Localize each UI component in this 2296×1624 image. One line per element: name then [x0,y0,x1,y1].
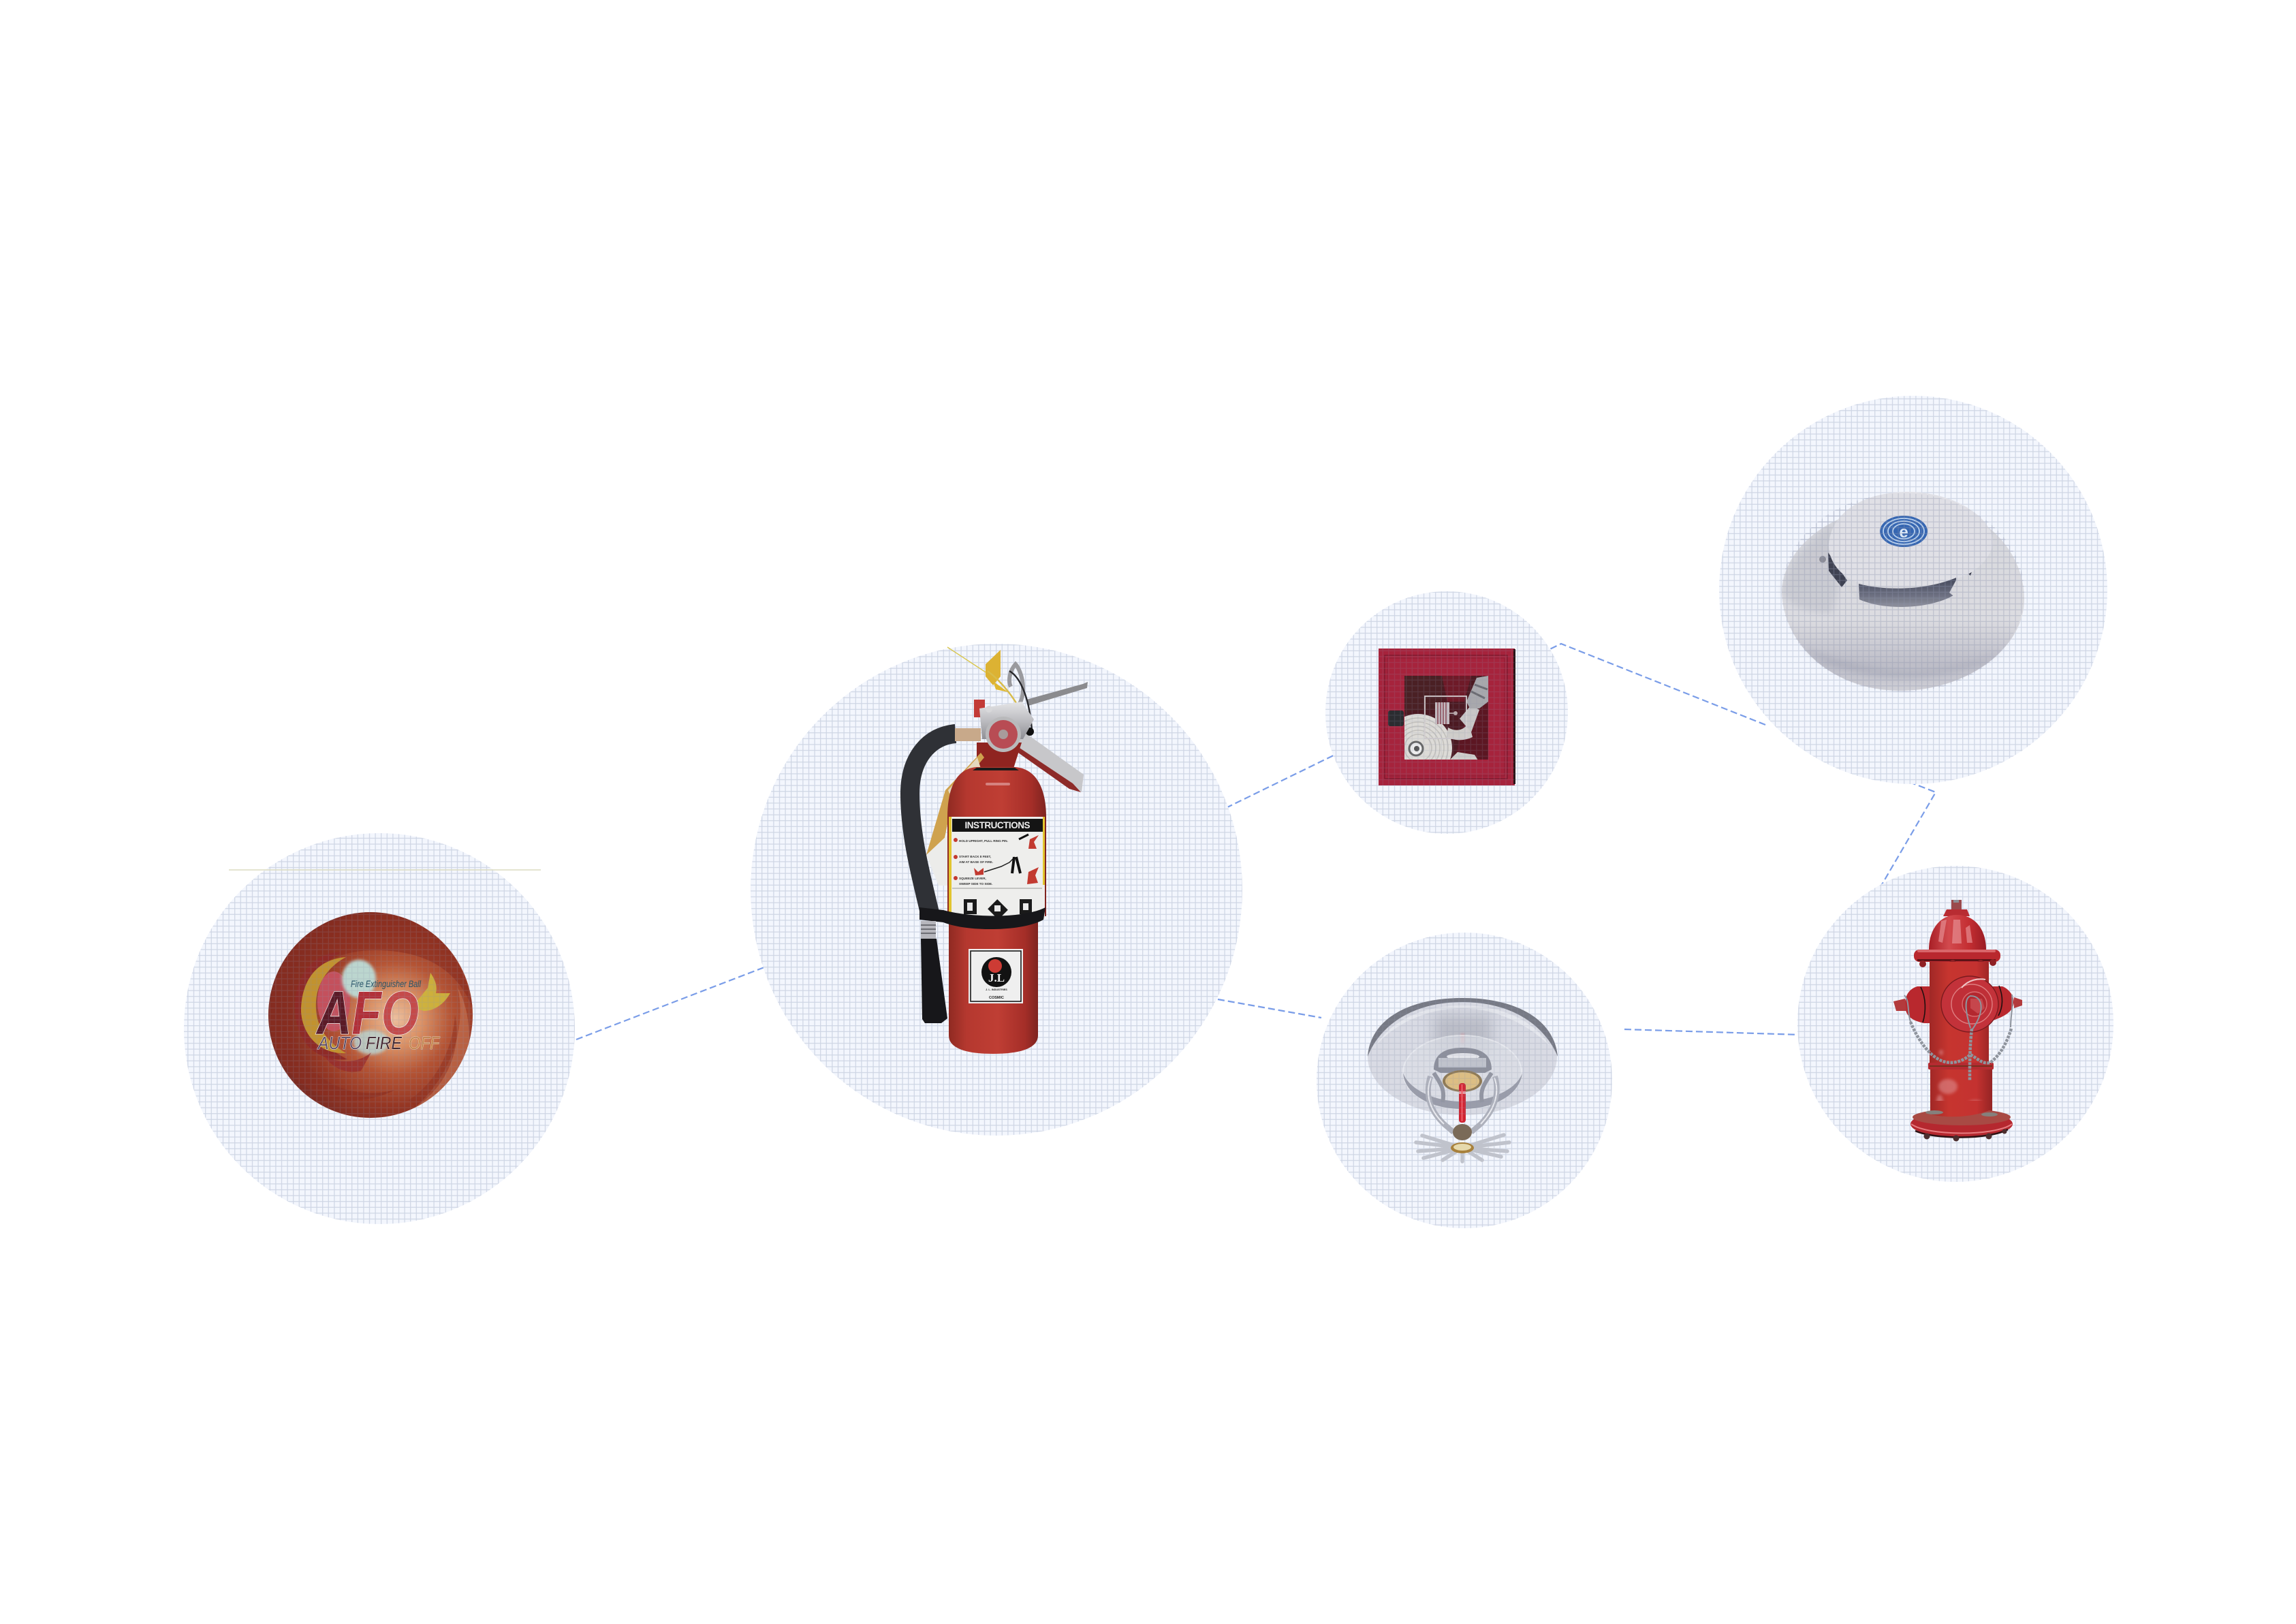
side outlets [1893,986,2022,1023]
bracket [1438,1058,1486,1067]
front cap [1941,976,1998,1032]
red bulb [1459,1083,1466,1123]
panel: hydrant circle [1797,866,2113,1182]
inner ring [1403,1035,1522,1109]
text: logo lettering: FIRE [366,1033,403,1053]
grid overlay on ball [268,912,473,1118]
instruction label: SQUEEZE LEVER, [959,877,986,880]
paint wear [1936,1050,1983,1110]
panel: fire ball circle [184,833,575,1224]
panel: fire extinguisher circle [751,644,1242,1136]
instruction label: INSTRUCTIONS [964,820,1030,830]
knuckle [1453,1124,1472,1140]
base [1910,1101,2013,1138]
connector: dashed links between items [576,644,1936,1040]
icon: smoke detector [1782,492,2024,691]
instruction label: START BACK 8 FEET, [959,855,991,858]
flange [1914,950,2000,962]
valve head [974,700,1034,768]
panel: smoke detector circle [1719,396,2107,784]
diagram: fire safety equipment network [184,396,2113,1228]
bolts [1919,959,1996,967]
icon: sprinkler head [1368,998,1558,1161]
instruction label: HOLD UPRIGHT, PULL RING PIN. [959,839,1008,843]
label: inner white frame [1425,696,1466,738]
text: logo lettering: Fire Extinguisher Ball [351,978,422,989]
escutcheon plate [1368,998,1557,1115]
logo [1880,516,1928,547]
text: logo lettering: OFF [409,1033,441,1053]
chains [1904,995,2013,1080]
cylinder body [947,767,1046,1054]
foot bolts [1923,1129,2007,1142]
lever arms [1009,664,1088,792]
lock [1388,710,1404,726]
icon: hose reel cabinet [1379,649,1515,785]
slots [1819,550,1986,613]
text: logo lettering: AFO [315,980,419,1048]
instruction label [949,817,1045,920]
frame arms [1428,1076,1497,1132]
barrel [1930,962,1992,1112]
grid overlay on cabinet [1379,649,1515,785]
logo: e [1899,523,1908,542]
deflector [1416,1135,1509,1161]
hose roll [1404,714,1452,760]
mounting strap [919,907,1045,929]
maker label [969,949,1023,1003]
maker label: J.L [988,971,1005,984]
text: logo lettering: AUTO [317,1033,362,1053]
instruction label: AIM AT BASE OF FIRE. [959,860,993,864]
paper tags [926,753,984,886]
instruction label: SWEEP SIDE TO SIDE. [959,882,992,886]
grid overlay on detector [1782,493,2024,692]
panel: sprinkler circle [1317,933,1612,1228]
icon: fire hydrant [1893,900,2022,1142]
maker label: COSMIC [989,996,1004,1000]
icon: fire extinguisher [910,647,1088,1054]
icon: fire extinguisher ball [268,912,473,1124]
grid overlay on sprinkler [1368,998,1557,1115]
seal tag [947,647,1024,719]
maker label: J. L. INDUSTRIES [986,988,1007,991]
top nut and dome [1929,900,1986,950]
hose [910,728,981,913]
cap [1829,492,1993,587]
brass disc [1443,1070,1482,1092]
nozzle [921,921,947,1023]
panel: hose cabinet circle [1325,591,1568,834]
